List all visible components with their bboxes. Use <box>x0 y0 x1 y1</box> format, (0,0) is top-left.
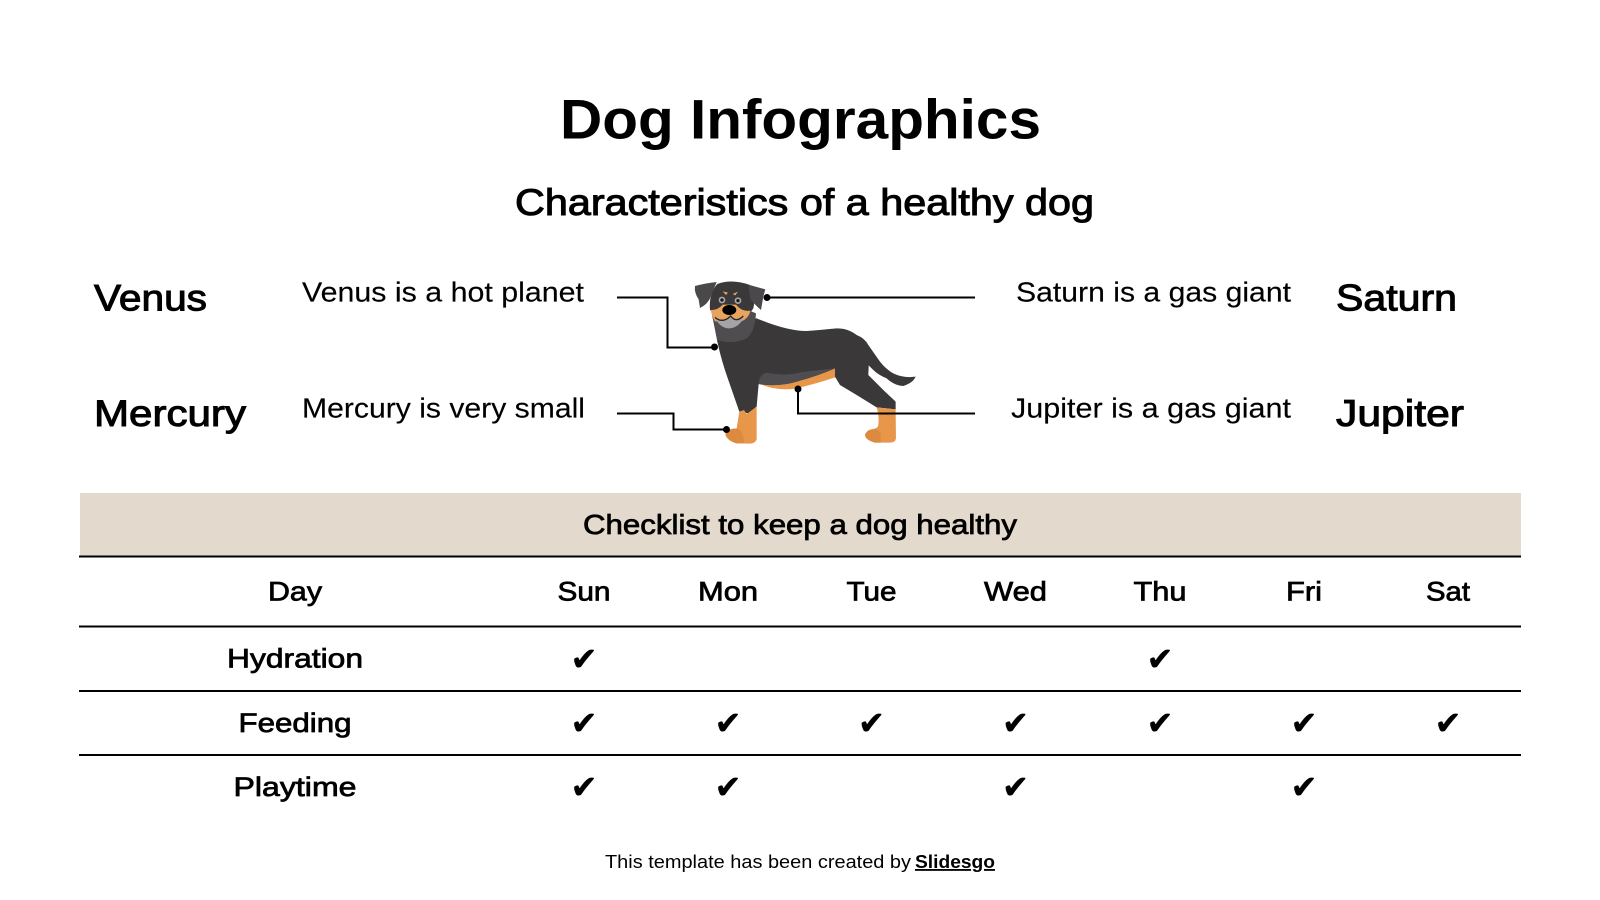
row: Playtime: Playtime <box>234 772 356 802</box>
footer credit: Slidesgo <box>915 851 995 872</box>
row: Hydration <box>227 640 1173 678</box>
row: Hydration: ✔ <box>1147 640 1173 678</box>
header row <box>268 576 1471 606</box>
row: Feeding <box>238 704 1461 742</box>
row: Playtime: ✔ <box>571 768 597 806</box>
label: Saturn: Saturn <box>1336 278 1457 318</box>
table: checklist <box>79 493 1521 806</box>
connector: Jupiter <box>794 386 975 414</box>
subtitle: Characteristics of a healthy dog <box>515 182 1094 223</box>
row: Feeding: ✔ <box>1002 704 1029 742</box>
dog illustration <box>695 282 916 444</box>
table banner <box>80 493 1521 556</box>
header row: Fri <box>1286 576 1322 606</box>
header row: Mon <box>698 576 758 606</box>
footer credit: This template has been created by <box>605 851 912 872</box>
description: Saturn: Saturn is a gas giant <box>1016 276 1291 308</box>
row: Hydration: ✔ <box>571 640 597 678</box>
row: Feeding: ✔ <box>1291 704 1317 742</box>
header row: Thu <box>1134 576 1186 606</box>
title: Dog Infographics <box>560 88 1041 150</box>
label: Venus: Venus <box>94 278 207 318</box>
description: Venus: Venus is a hot planet <box>302 276 584 308</box>
header row: Sun <box>558 576 610 606</box>
label: Jupiter: Jupiter <box>1336 393 1464 434</box>
connector: Venus <box>617 298 718 350</box>
row: Playtime <box>234 768 1317 806</box>
table heading: Checklist to keep a dog healthy <box>583 509 1017 540</box>
row: Hydration: Hydration <box>227 644 363 674</box>
row: Feeding: ✔ <box>715 704 741 742</box>
connector: Saturn <box>764 294 975 301</box>
header row: Sat <box>1426 576 1471 606</box>
description: Mercury: Mercury is very small <box>302 392 585 424</box>
row: Playtime: ✔ <box>1002 768 1029 806</box>
row: Playtime: ✔ <box>715 768 741 806</box>
label: Mercury: Mercury <box>94 393 247 434</box>
connector: Mercury <box>617 414 730 433</box>
row: Feeding: ✔ <box>858 704 885 742</box>
header row: Day <box>268 576 323 606</box>
header row: Wed <box>984 576 1047 606</box>
description: Jupiter: Jupiter is a gas giant <box>1011 392 1291 424</box>
row: Feeding: ✔ <box>571 704 597 742</box>
row: Playtime: ✔ <box>1291 768 1317 806</box>
header row: Tue <box>846 576 896 606</box>
row: Feeding: ✔ <box>1435 704 1461 742</box>
row: Feeding: ✔ <box>1147 704 1173 742</box>
row: Feeding: Feeding <box>238 708 352 738</box>
